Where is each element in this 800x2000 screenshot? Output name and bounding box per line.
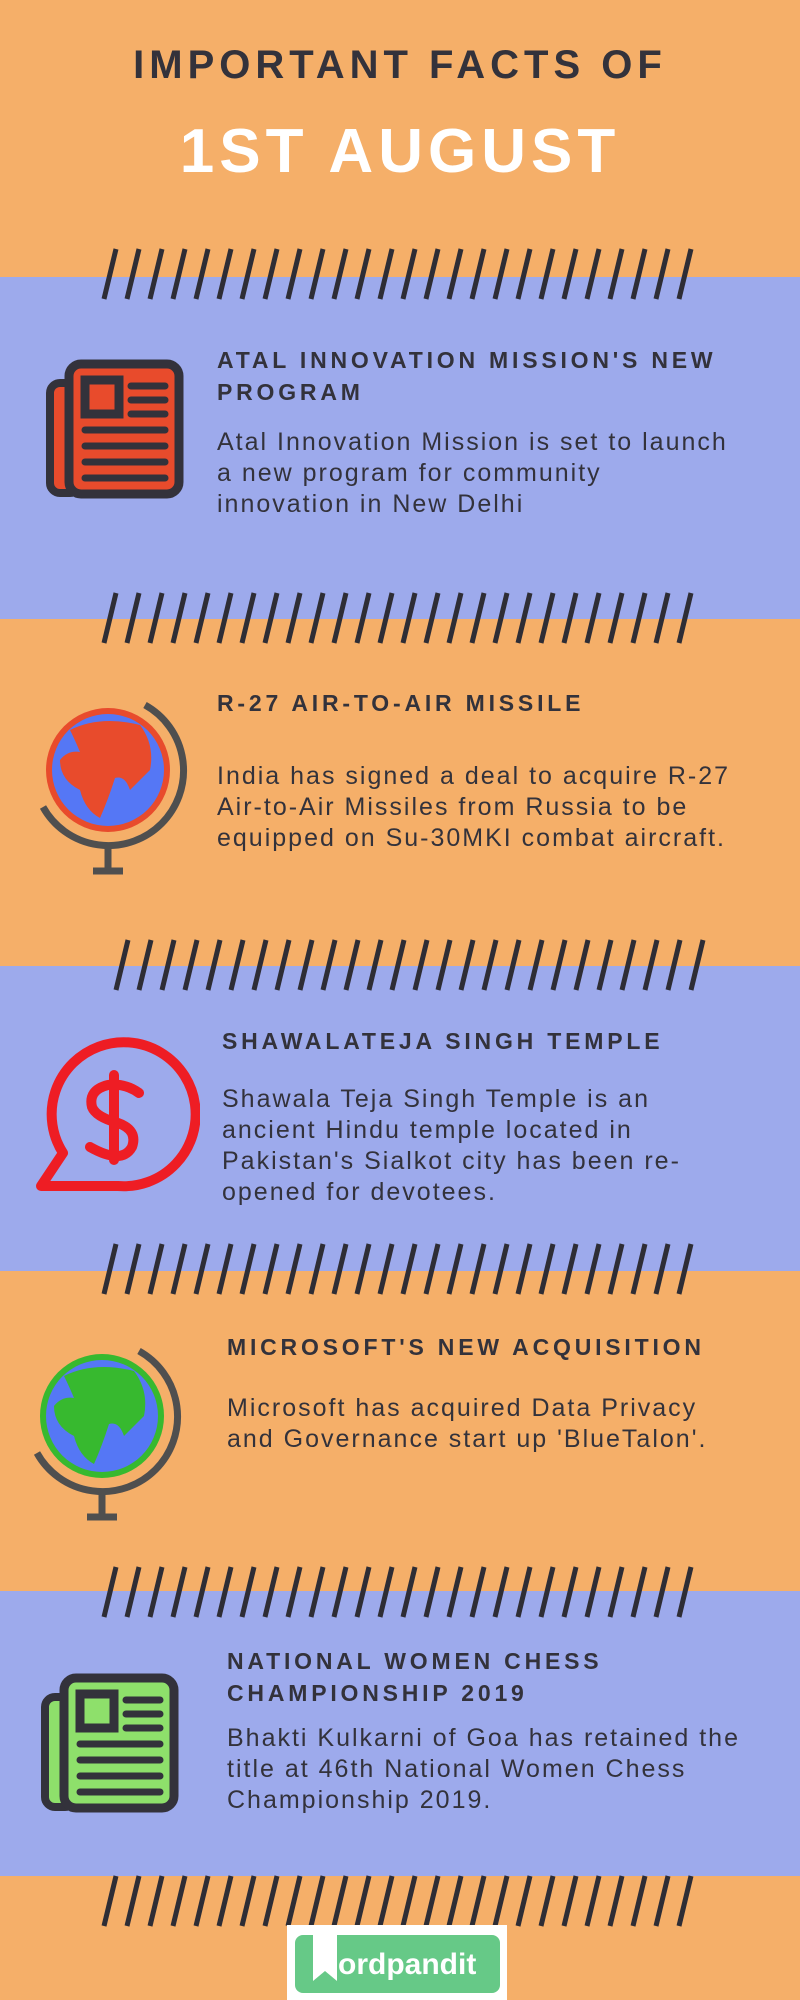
heading 5: NATIONAL WOMEN CHESS bbox=[227, 1648, 602, 1674]
text 1 bbox=[217, 428, 728, 518]
text 1: a new program for community bbox=[217, 459, 602, 487]
text 3: opened for devotees. bbox=[222, 1178, 497, 1206]
heading 5: CHAMPIONSHIP 2019 bbox=[227, 1680, 528, 1706]
text 2: India has signed a deal to acquire R-27 bbox=[217, 762, 730, 790]
text 3: Shawala Teja Singh Temple is an bbox=[222, 1085, 650, 1113]
text 2: Air-to-Air Missiles from Russia to be bbox=[217, 793, 688, 821]
heading 1: ATAL INNOVATION MISSION'S NEW bbox=[217, 347, 716, 373]
text 4 bbox=[227, 1394, 707, 1453]
text 2 bbox=[217, 762, 730, 852]
text 2: equipped on Su-30MKI combat aircraft. bbox=[217, 824, 726, 852]
icon: globe green bbox=[34, 1348, 182, 1520]
text 4: Microsoft has acquired Data Privacy bbox=[227, 1394, 697, 1422]
heading 1: PROGRAM bbox=[217, 379, 364, 405]
logo: wordpandit: ordpandit bbox=[338, 1948, 476, 1981]
title bbox=[133, 43, 667, 186]
title: IMPORTANT FACTS OF bbox=[133, 43, 667, 87]
text 5: title at 46th National Women Chess bbox=[227, 1755, 686, 1783]
text 4: and Governance start up 'BlueTalon'. bbox=[227, 1425, 707, 1453]
heading 5 bbox=[227, 1648, 602, 1706]
icon: newspaper green bbox=[41, 1674, 178, 1812]
icon: newspaper red bbox=[46, 360, 184, 498]
text 5 bbox=[227, 1724, 740, 1814]
text 5: Championship 2019. bbox=[227, 1786, 492, 1814]
heading 1 bbox=[217, 347, 716, 405]
heading 3: SHAWALATEJA SINGH TEMPLE bbox=[222, 1028, 663, 1054]
icon: dollar speech bubble bbox=[36, 1037, 200, 1192]
heading 2: R-27 AIR-TO-AIR MISSILE bbox=[217, 690, 584, 716]
text 5: Bhakti Kulkarni of Goa has retained the bbox=[227, 1724, 740, 1752]
heading 4: MICROSOFT'S NEW ACQUISITION bbox=[227, 1334, 705, 1360]
text 3: ancient Hindu temple located in bbox=[222, 1116, 633, 1144]
text 1: innovation in New Delhi bbox=[217, 490, 524, 518]
text 3 bbox=[222, 1085, 681, 1206]
text 1: Atal Innovation Mission is set to launch bbox=[217, 428, 728, 456]
title: 1ST AUGUST bbox=[180, 117, 620, 186]
icon: globe red bbox=[40, 702, 188, 874]
logo: wordpandit bbox=[287, 1925, 507, 2000]
text 3: Pakistan's Sialkot city has been re- bbox=[222, 1147, 681, 1175]
